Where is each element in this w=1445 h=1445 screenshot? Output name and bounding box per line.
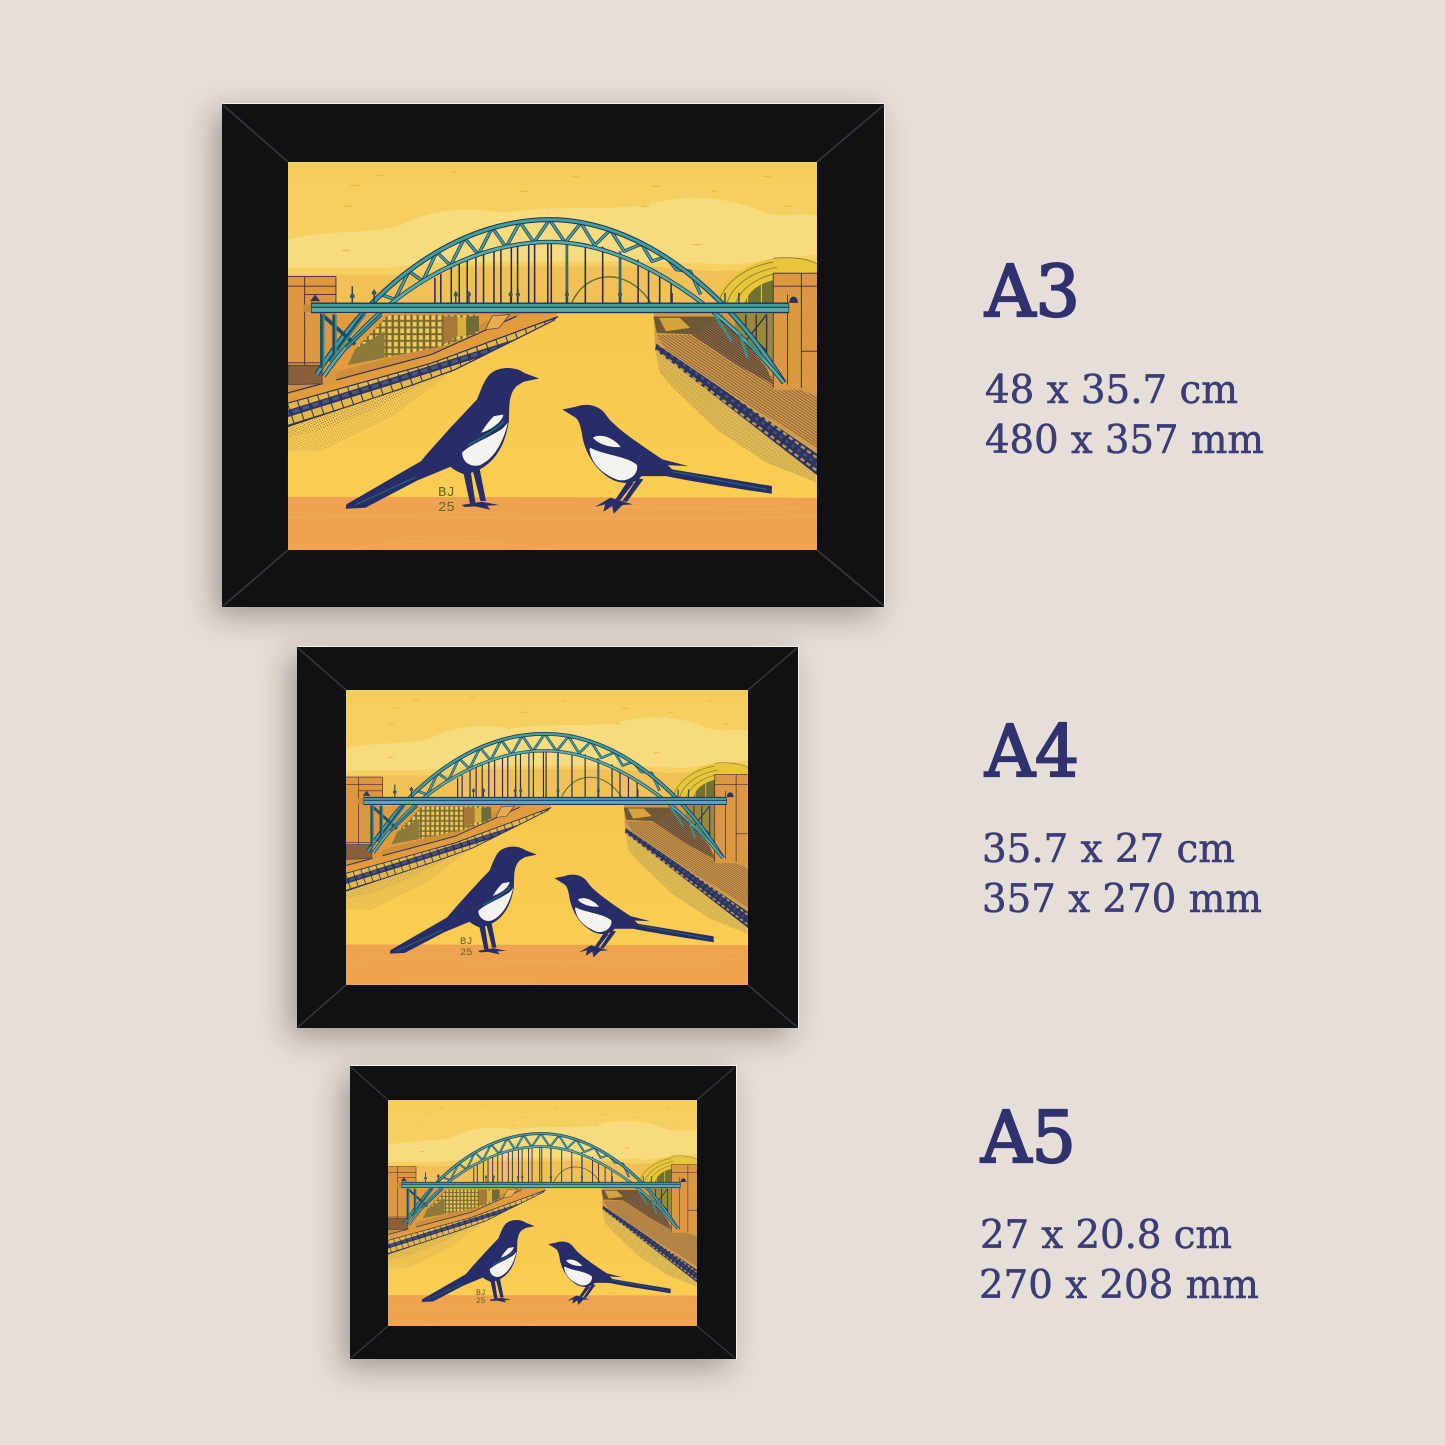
size label: A5	[979, 1096, 1259, 1308]
framed print: A4	[297, 646, 799, 1028]
artwork A5	[388, 1100, 697, 1326]
artwork A4	[346, 690, 748, 985]
framed print: A3	[222, 103, 885, 607]
artwork A3	[288, 162, 817, 550]
size label: A4: A4	[984, 710, 1079, 793]
size label: A5: A5	[980, 1096, 1076, 1179]
size label: A5: 270 x 208 mm	[979, 1263, 1259, 1308]
size label: A4: 357 x 270 mm	[982, 877, 1262, 922]
size label: A4: 35.7 x 27 cm	[982, 827, 1235, 872]
size label: A3: 48 x 35.7 cm	[985, 368, 1238, 413]
size label: A4	[982, 710, 1262, 922]
artwork A3: 25	[438, 500, 455, 516]
size label: A3	[984, 250, 1264, 463]
size label: A3: 480 x 357 mm	[985, 418, 1264, 463]
size label: A3: A3	[984, 250, 1080, 333]
framed print: A5	[350, 1065, 737, 1359]
size label: A5: 27 x 20.8 cm	[980, 1213, 1232, 1258]
artwork A3: BJ	[438, 485, 455, 501]
artwork A4: BJ	[460, 936, 473, 948]
artwork A4: 25	[460, 947, 473, 959]
artwork A5: BJ	[476, 1289, 486, 1298]
artwork A5: 25	[476, 1297, 486, 1306]
